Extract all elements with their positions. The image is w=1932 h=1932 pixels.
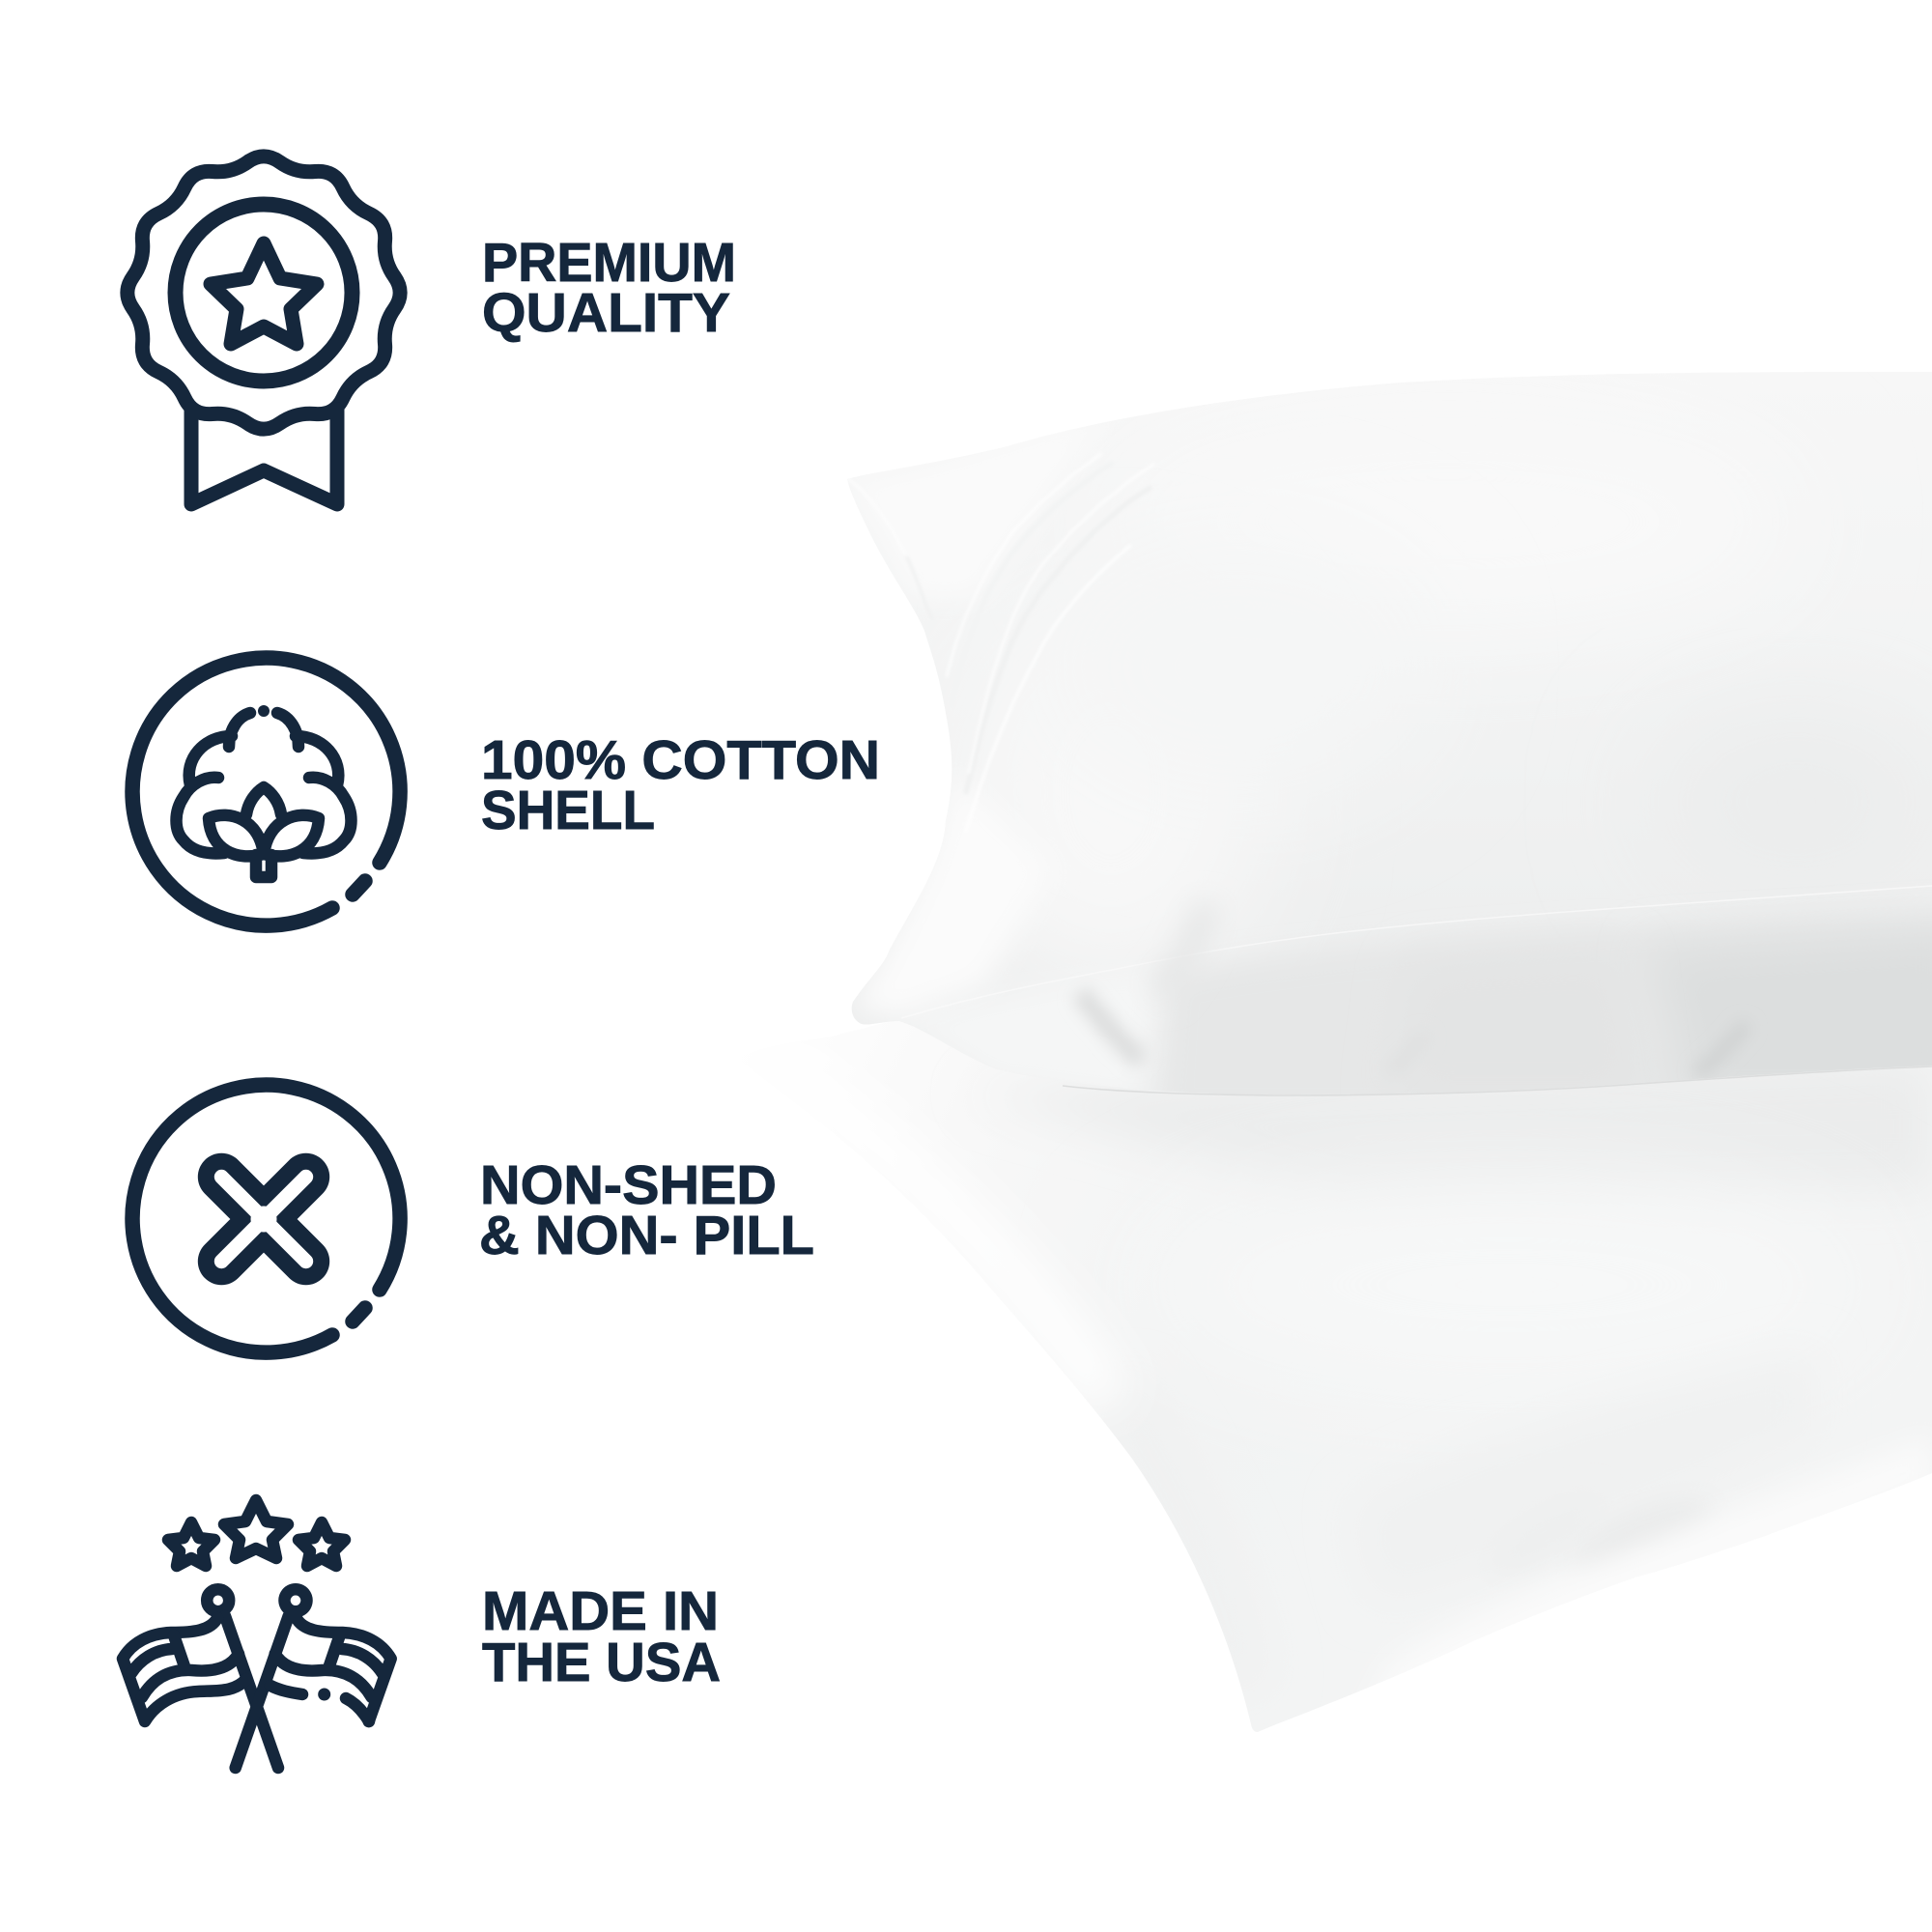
bottom pillow [971,1066,1932,1732]
right star [298,1522,345,1566]
row 1: premium quality [128,156,736,504]
label: non-shed and non-pill [479,1154,814,1265]
label: made in the usa: MADE IN [482,1580,719,1641]
cross outline [221,1177,306,1262]
top pillow [831,357,1932,1121]
hem fold shading [1184,980,1254,1028]
label: premium quality: QUALITY [482,282,730,343]
badge inner ring [176,205,352,381]
label: 100% cotton shell: SHELL [481,780,655,840]
cotton tip dot [258,705,270,717]
label: 100% cotton shell: 100% COTTON [481,729,880,790]
cross inner [221,1177,306,1262]
cotton leaves and stem [209,787,319,877]
label: non-shed and non-pill: & NON- PILL [479,1205,814,1265]
row 4: made in the usa [123,1500,721,1768]
icon: crossed flags and stars [123,1500,391,1768]
row 2: cotton shell [132,658,880,925]
open ring [132,658,400,925]
row 3: non-shed [132,1085,814,1352]
right flag and pole [236,1589,391,1768]
badge scalloped edge [128,156,400,429]
ribbon tails [191,410,337,504]
centre star [224,1500,288,1558]
icon: cotton boll in circle [132,658,400,925]
icon: award ribbon badge [128,156,400,504]
cotton right puffs [277,713,352,853]
badge star [211,243,317,344]
left flag and pole [123,1589,278,1768]
label: premium quality [482,232,736,343]
hem seam [1234,885,1932,949]
left star [168,1522,214,1566]
label: made in the usa: THE USA [482,1632,721,1692]
pillow stack photo [849,372,1932,1732]
creases [1167,916,1208,960]
open ring [132,1085,400,1352]
label: 100% cotton shell [481,729,880,840]
icon: cross in circle [132,1085,400,1352]
label: non-shed and non-pill: NON-SHED [480,1154,777,1215]
corner highlight [867,828,1003,1012]
label: made in the usa [482,1580,721,1692]
label: premium quality: PREMIUM [482,232,736,293]
wrinkles [848,454,1154,831]
top pillow bottom edge line [1063,1066,1932,1095]
cotton left puffs [176,713,250,853]
